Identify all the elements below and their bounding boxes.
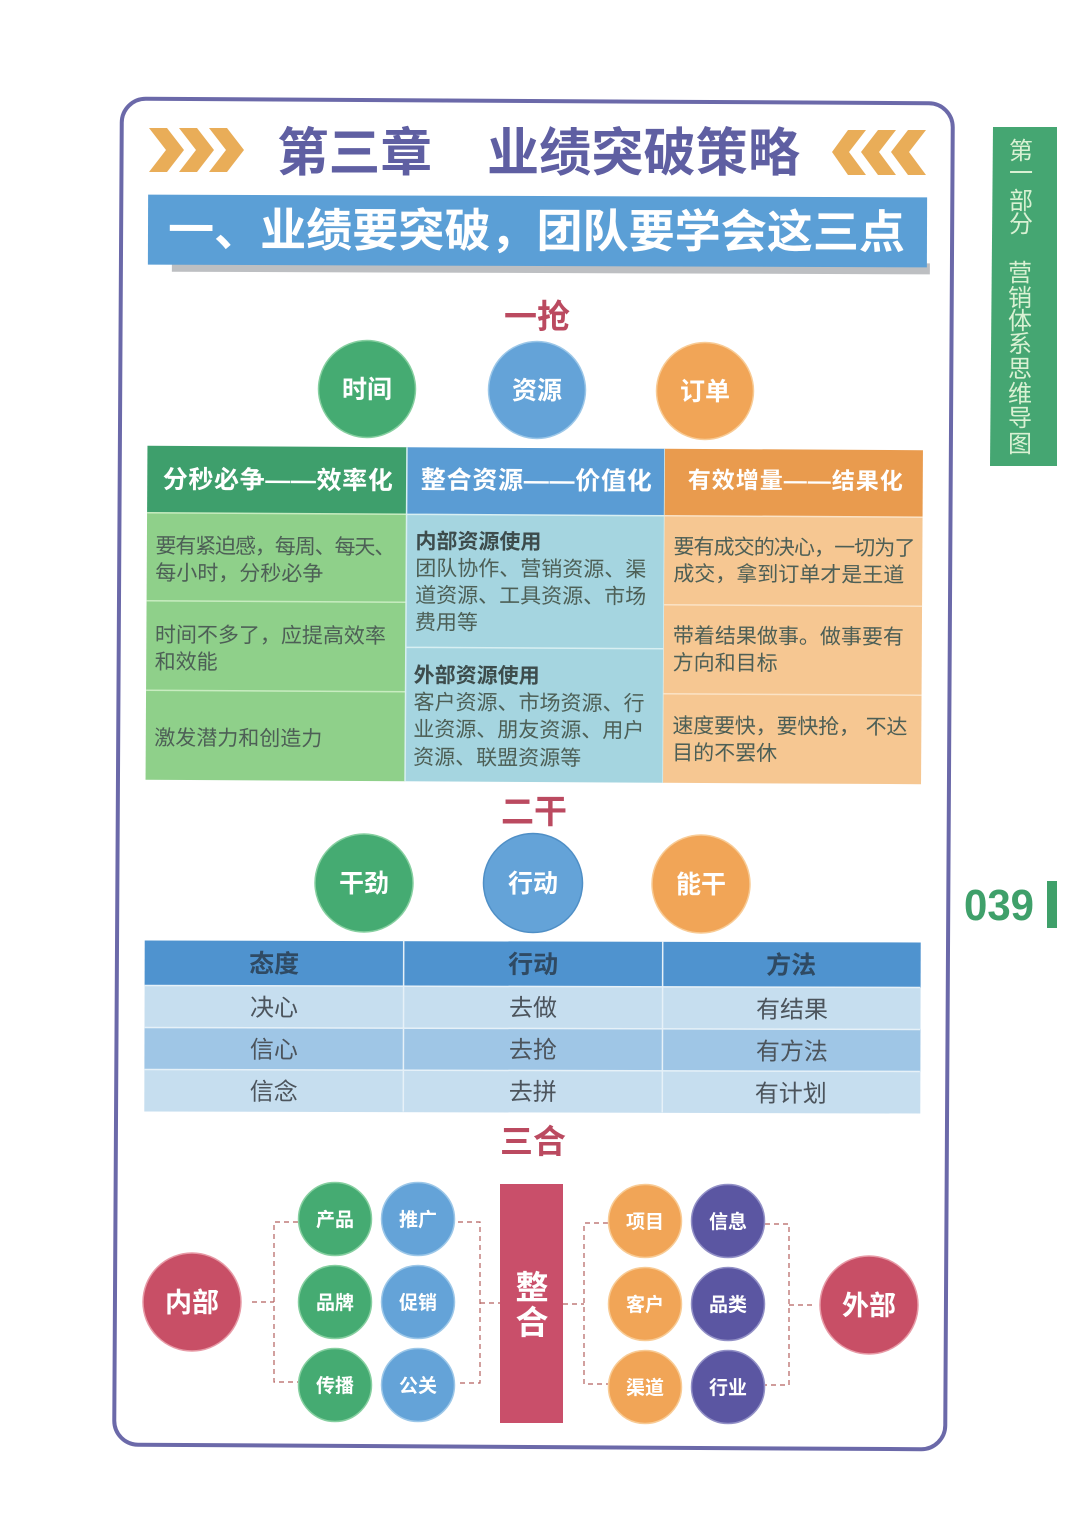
nodes: internal green: 品牌 <box>316 1292 354 1314</box>
column: 资源: 业资源、朋友资源、用户 <box>413 718 644 743</box>
nodes: external purple <box>692 1184 764 1424</box>
column: 订单: 速度要快，要快抢， 不达 <box>672 715 907 739</box>
nodes: external purple: 信息 <box>709 1210 747 1233</box>
circles: 一抢 <box>318 340 754 440</box>
column: 时间: 和效能 <box>155 651 218 674</box>
column: 资源: 外部资源使用 <box>414 664 540 688</box>
bar: 整合 <box>500 1184 563 1423</box>
nodes: external orange: 渠道 <box>626 1376 664 1399</box>
panel frame <box>114 99 953 1449</box>
node: 外部 <box>820 1256 918 1354</box>
table rows: 决心 <box>250 995 298 1022</box>
column: 资源: 内部资源使用 <box>415 530 541 554</box>
table: 一抢 details <box>146 446 923 784</box>
column: 资源: 整合资源——价值化 <box>421 466 652 496</box>
nodes: internal green: 产品 <box>316 1209 354 1231</box>
circles: 一抢: 时间 <box>342 376 392 404</box>
dashed connectors <box>252 1222 812 1385</box>
table header <box>145 940 921 988</box>
nodes: external orange: 项目 <box>626 1211 664 1233</box>
page number: 039 <box>964 881 1034 930</box>
column: 资源: 团队协作、营销资源、渠 <box>415 557 646 582</box>
table header: 行动 <box>508 951 558 979</box>
table header: 方法 <box>766 951 816 980</box>
side tab: 第一部分营销体系思维导图 <box>1008 138 1033 458</box>
heading: 二干: 二干 <box>501 793 567 830</box>
column: 资源: 资源、联盟资源等 <box>413 746 581 770</box>
nodes: internal blue <box>382 1182 454 1422</box>
column: 资源: 道资源、工具资源、市场 <box>415 584 646 609</box>
column: 时间: 要有紧迫感，每周、每天、 <box>155 535 395 559</box>
bar: 整合: 合 <box>516 1304 548 1341</box>
nodes: internal blue: 推广 <box>399 1209 437 1231</box>
nodes: external orange: 客户 <box>626 1293 664 1316</box>
section banner: 一、业绩要突破，团队要学会这三点 <box>168 204 905 258</box>
bar: 整合: 整 <box>516 1269 548 1306</box>
table rows <box>144 940 921 1114</box>
heading: 一抢: 一抢 <box>504 298 570 335</box>
column: 时间 <box>146 446 407 781</box>
nodes: internal blue: 公关 <box>399 1375 437 1397</box>
column: 订单: 有效增量——结果化 <box>688 467 903 494</box>
circles: 一抢: 订单 <box>680 378 730 406</box>
table rows: 有计划 <box>755 1081 827 1108</box>
table: 二干 <box>144 940 921 1114</box>
table rows: 有方法 <box>756 1039 828 1066</box>
column: 资源: 客户资源、市场资源、行 <box>413 691 645 716</box>
nodes: external purple: 行业 <box>709 1377 747 1399</box>
circles: 二干: 干劲 <box>339 870 389 898</box>
heading: 三合: 三合 <box>500 1123 566 1160</box>
column: 订单: 要有成交的决心，一切为了 <box>673 536 915 560</box>
column: 订单: 成交，拿到订单才是王道 <box>673 562 904 587</box>
column: 资源: 费用等 <box>415 611 478 635</box>
icon: left chevrons <box>149 128 244 172</box>
column: 订单: 目的不罢休 <box>672 742 777 765</box>
column: 订单: 带着结果做事。做事要有 <box>673 625 904 649</box>
circles: 一抢: 资源 <box>512 377 562 405</box>
table rows: 有结果 <box>756 997 828 1024</box>
nodes: internal green <box>298 1182 372 1422</box>
column: 时间: 时间不多了，应提高效率 <box>155 624 386 648</box>
circles: 二干: 行动 <box>508 870 558 898</box>
chapter title <box>277 125 800 183</box>
nodes: external orange <box>608 1184 682 1424</box>
chapter title: 第三章 <box>277 125 432 183</box>
table rows: 去做 <box>509 995 557 1022</box>
nodes: internal blue: 促销 <box>399 1292 437 1314</box>
column: 订单 <box>663 449 923 784</box>
node: 内部 <box>143 1253 241 1351</box>
column: 时间: 每小时，分秒必争 <box>155 562 323 586</box>
column: 订单: 方向和目标 <box>673 652 778 675</box>
column: 时间: 激发潜力和创造力 <box>154 727 322 751</box>
column: 时间: 分秒必争——效率化 <box>163 466 393 495</box>
table header: 态度 <box>249 950 299 978</box>
chapter title: 业绩突破策略 <box>487 125 800 183</box>
section banner <box>148 195 930 274</box>
node: 外部: 外部 <box>842 1291 896 1321</box>
column: 资源 <box>405 447 665 783</box>
node: 内部: 内部 <box>165 1288 219 1318</box>
table rows: 去抢 <box>509 1037 557 1064</box>
nodes: external purple: 品类 <box>709 1294 747 1316</box>
table rows: 去拼 <box>509 1079 557 1106</box>
icon: right chevrons <box>832 130 926 175</box>
circles: 二干 <box>315 834 750 933</box>
nodes: internal green: 传播 <box>316 1375 354 1397</box>
table rows: 信念 <box>250 1079 298 1106</box>
circles: 二干: 能干 <box>676 871 726 899</box>
table rows: 信心 <box>250 1037 298 1064</box>
side tab <box>990 127 1057 466</box>
